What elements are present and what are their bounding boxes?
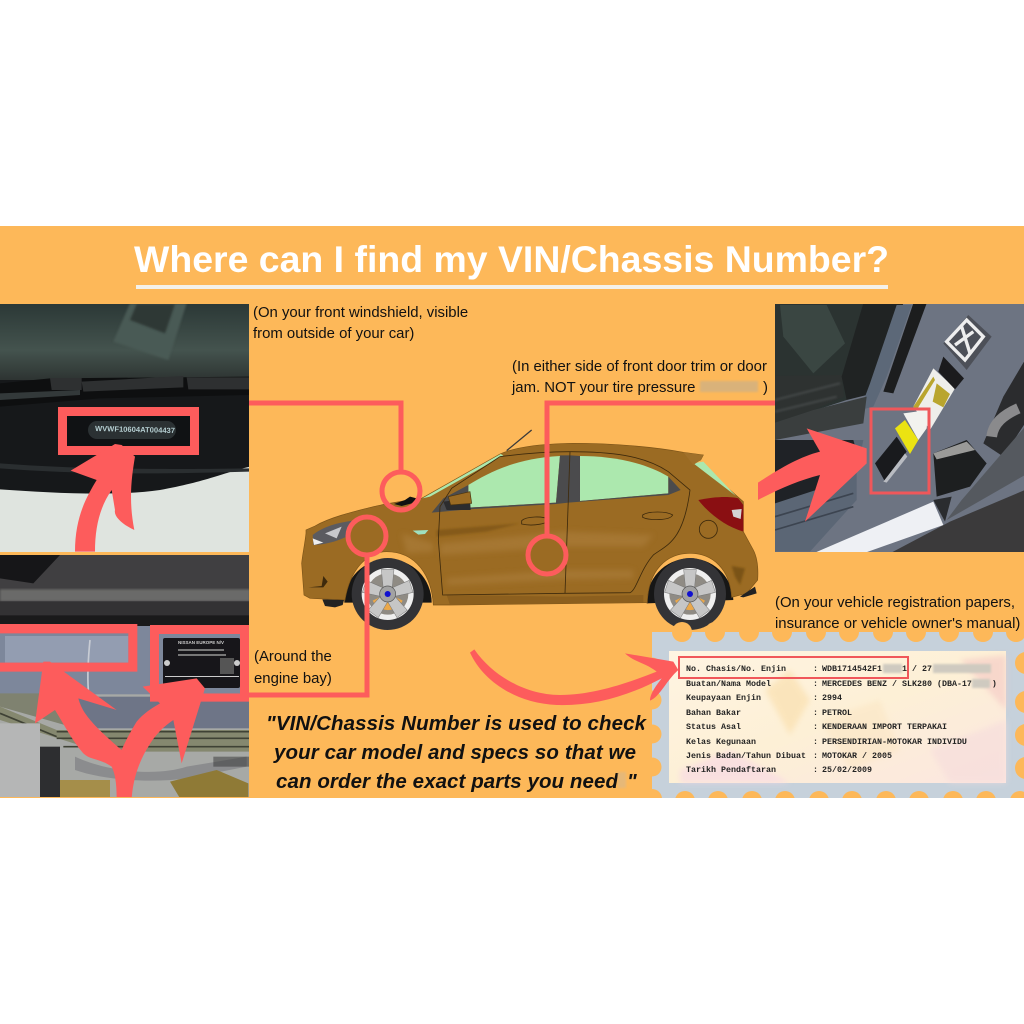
form rows: KENDERAAN IMPORT TERPAKAI xyxy=(822,722,947,732)
caption: registration papers: (On your vehicle registration papers, xyxy=(775,595,1015,611)
form rows: Buatan/Nama Model xyxy=(686,679,771,689)
red highlight box B xyxy=(150,625,250,702)
caption: door jamb: jam. NOT your tire pressure xyxy=(511,380,695,396)
quote: your car model and specs so that we xyxy=(273,741,636,764)
callout line: windshield xyxy=(249,403,420,510)
car illustration xyxy=(302,430,758,630)
fender badge xyxy=(413,530,428,535)
photo: engine bay plates xyxy=(0,555,250,798)
form rows: Tarikh Pendaftaran xyxy=(686,765,776,775)
red highlight box A xyxy=(0,624,137,672)
quote: " xyxy=(627,770,637,793)
quote: "VIN/Chassis Number is used to check xyxy=(266,712,648,735)
callout line: door jamb xyxy=(528,403,775,574)
title: Where can I find my VIN/Chassis Number? xyxy=(134,239,889,280)
quote xyxy=(266,712,648,793)
orange background panel xyxy=(0,226,1024,798)
stamp scallops xyxy=(642,622,1024,811)
form rows: WDB1714542F1 1 / 27 xyxy=(822,664,932,674)
arrow to VIN box xyxy=(71,444,135,552)
form rows: : xyxy=(813,708,818,718)
sticker highlight box xyxy=(871,409,929,493)
form rows: Status Asal xyxy=(686,722,741,732)
forked arrow xyxy=(35,662,205,798)
caption: engine bay: engine bay) xyxy=(254,671,332,687)
blurred redactions xyxy=(883,664,991,688)
highlighted VIN box xyxy=(62,412,194,450)
rubber hose xyxy=(992,408,1018,437)
body highlights xyxy=(440,532,653,555)
spoiler tip xyxy=(683,452,703,465)
form rows: Jenis Badan/Tahun Dibuat xyxy=(686,751,806,761)
side mirror xyxy=(443,492,472,510)
form rows: : xyxy=(813,751,818,761)
caption: windshield: (On your front windshield, visible xyxy=(253,305,468,321)
window trim xyxy=(432,455,681,513)
wheel arches xyxy=(344,558,733,603)
door lines and handles xyxy=(438,452,717,595)
right side dark cavity xyxy=(983,360,1024,457)
form rows xyxy=(686,664,997,775)
arrow to sticker xyxy=(758,428,867,522)
form rows: Kelas Kegunaan xyxy=(686,737,756,747)
form rows: 25/02/2009 xyxy=(822,765,872,775)
form rows: Keupayaan Enjin xyxy=(686,693,761,703)
form rows: MOTOKAR / 2005 xyxy=(822,751,892,761)
quote: can order the exact parts you need xyxy=(276,770,618,793)
taillight xyxy=(698,497,743,532)
caption: door jamb: (In either side of front door trim or door xyxy=(512,359,767,375)
sill steps xyxy=(775,440,863,552)
caption: door jamb xyxy=(511,359,768,396)
asphalt xyxy=(890,490,1024,553)
form rows: PERSENDIRIAN-MOTOKAR INDIVIDU xyxy=(822,737,967,747)
caption: engine bay: (Around the xyxy=(254,649,332,665)
windows xyxy=(422,454,736,508)
front wheel xyxy=(352,558,424,630)
car body xyxy=(302,443,758,605)
form rows: Bahan Bakar xyxy=(686,708,741,718)
highlight box on chassis row xyxy=(679,657,908,678)
wiper xyxy=(394,497,417,506)
photo: windshield VIN plate xyxy=(0,303,250,553)
caption: registration papers: insurance or vehicle owner's manual) xyxy=(775,616,1020,632)
caption: door jamb: ) xyxy=(763,380,768,396)
form rows: : xyxy=(813,664,818,674)
latch xyxy=(933,440,987,497)
form rows: No. Chasis/No. Enjin xyxy=(686,664,786,674)
white sill xyxy=(813,502,943,553)
form rows: : xyxy=(813,737,818,747)
form rows: : xyxy=(813,693,818,703)
front vent and mudflap xyxy=(308,576,328,587)
seat xyxy=(775,303,870,423)
rear wheel xyxy=(654,558,726,630)
curved arrow to registration document xyxy=(470,649,678,705)
form rows: : xyxy=(813,679,818,689)
door sticker xyxy=(875,357,964,483)
certificate sheet xyxy=(669,651,1006,783)
form rows: MERCEDES BENZ / SLK280 (DBA-17 ) xyxy=(822,679,997,689)
form rows: : xyxy=(813,722,818,732)
headlight xyxy=(313,519,372,545)
black data plate: NISSAN EUROPE N/V xyxy=(178,640,224,645)
door latch striker xyxy=(943,315,992,370)
caption: windshield: from outside of your car) xyxy=(253,326,414,342)
callout line: engine bay xyxy=(249,517,386,695)
black data plate xyxy=(163,638,240,688)
antenna xyxy=(507,430,532,451)
form rows: 2994 xyxy=(822,693,842,703)
form rows: : xyxy=(813,765,818,775)
form rows: PETROL xyxy=(822,708,852,718)
highlighted VIN box: WVWF10604AT004437 xyxy=(95,424,175,435)
registration document with stamp frame xyxy=(642,622,1024,811)
photo: door jamb sticker xyxy=(775,303,1024,553)
